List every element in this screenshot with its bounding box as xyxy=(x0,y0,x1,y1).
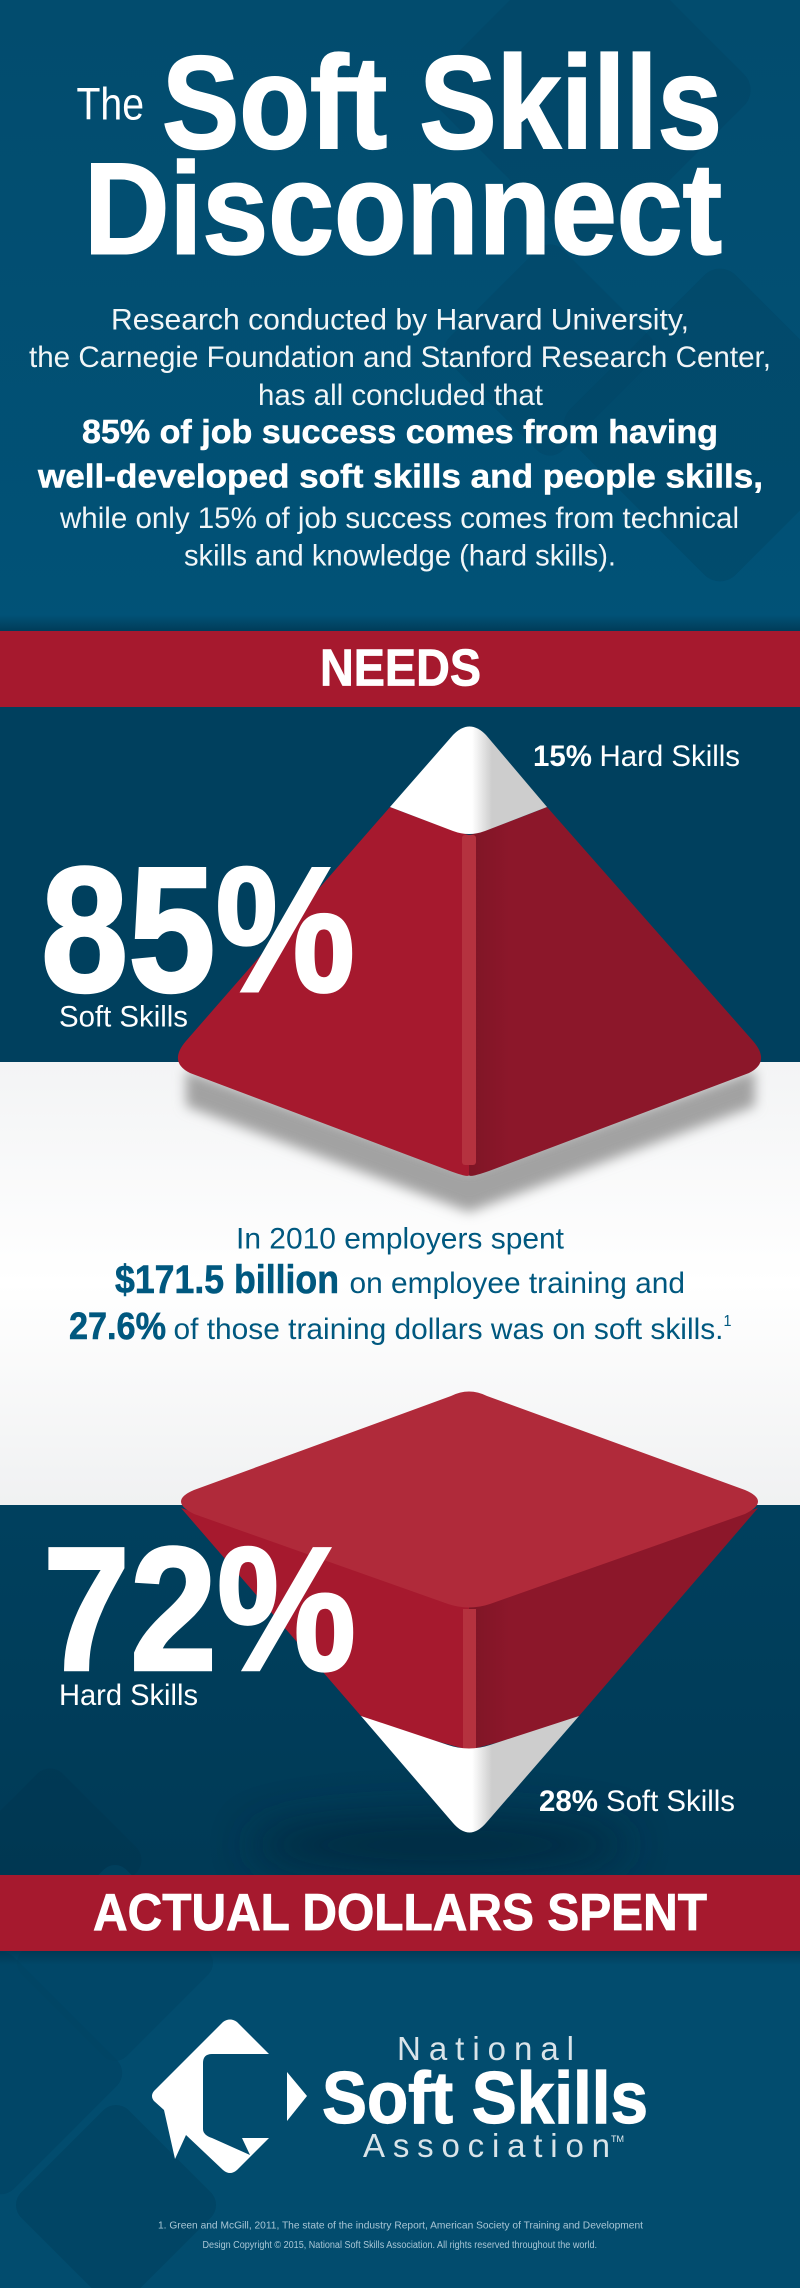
logo wordmark: TM xyxy=(611,2134,624,2144)
text block: training spend: on employee training and xyxy=(350,1267,685,1300)
logo wordmark xyxy=(322,2030,648,2164)
title xyxy=(76,29,722,282)
inverted pyramid right face xyxy=(469,1508,758,1750)
heading band: actual dollars spent: ACTUAL DOLLARS SPENT xyxy=(93,1884,707,1942)
logo: national soft skills association xyxy=(152,2020,648,2173)
text block: training spend: In 2010 employers spent xyxy=(236,1222,565,1256)
text block: training spend: $171.5 billion xyxy=(115,1258,339,1302)
intro paragraph: while only 15% of job success comes from technical xyxy=(59,502,739,535)
background: top header panel xyxy=(0,0,800,631)
footnotes: 1. Green and McGill, 2011, The state of the industry Report, American Society of Training and Development xyxy=(158,2220,643,2232)
stat: 15% hard skills xyxy=(533,740,740,773)
title: Soft Skills xyxy=(162,29,722,176)
inverted pyramid shadow xyxy=(250,1817,630,1873)
background: footer panel xyxy=(0,1858,800,2288)
intro paragraph: has all concluded that xyxy=(258,379,544,412)
text block: training spend: 27.6% xyxy=(69,1306,166,1348)
pyramid right face xyxy=(469,807,761,1176)
logo wordmark: National xyxy=(397,2030,574,2067)
background: white middle panel xyxy=(0,1062,800,1505)
stat: 28% soft skills: 28% xyxy=(539,1785,598,1818)
pyramid tip: hard skills xyxy=(390,726,547,834)
inverted pyramid top face xyxy=(181,1392,758,1608)
stat: 85% soft skills: Soft Skills xyxy=(59,1000,188,1034)
logo wordmark: Association xyxy=(363,2127,610,2164)
title: The xyxy=(76,78,144,130)
intro paragraph: the Carnegie Foundation and Stanford Research Center, xyxy=(29,341,771,374)
stat: 15% hard skills: Hard Skills xyxy=(600,740,740,773)
text block: training spend xyxy=(69,1222,732,1348)
text block: training spend: of those training dollars was on soft skills. xyxy=(174,1313,724,1346)
inverted pyramid left face: hard skills xyxy=(181,1508,469,1750)
inverted pyramid edge highlight xyxy=(463,1609,476,1750)
intro paragraph: Research conducted by Harvard University, xyxy=(111,304,689,337)
pyramid shadow xyxy=(186,1070,755,1212)
stat: 85% soft skills: 85% xyxy=(41,830,355,1029)
stat: 28% soft skills xyxy=(539,1785,735,1818)
chart: needs pyramid xyxy=(178,726,761,1212)
title: Disconnect xyxy=(84,136,722,282)
icon: logo mark xyxy=(152,2020,269,2173)
pyramid left face: soft skills xyxy=(178,807,469,1176)
footnotes: Design Copyright © 2015, National Soft Skills Association. All rights reserved throughout the world. xyxy=(202,2240,597,2251)
footnotes xyxy=(158,2220,643,2251)
heading band: needs xyxy=(0,631,800,707)
background: dark dollars panel xyxy=(0,1505,800,1959)
heading band: needs: NEEDS xyxy=(320,640,481,698)
intro paragraph: 85% of job success comes from having xyxy=(82,413,718,450)
background: dark needs panel xyxy=(0,707,800,1062)
chart: dollars pyramid xyxy=(181,1392,758,1873)
intro paragraph xyxy=(29,304,771,573)
stat: 15% hard skills: 15% xyxy=(533,740,592,773)
logo wordmark: Soft Skills xyxy=(322,2058,648,2139)
icon: logo arrow xyxy=(287,2072,307,2121)
stat: 72% hard skills: 72% xyxy=(43,1512,356,1708)
intro paragraph: skills and knowledge (hard skills). xyxy=(184,540,616,573)
stat: 72% hard skills: Hard Skills xyxy=(59,1679,198,1712)
inverted pyramid tip: soft skills xyxy=(361,1716,579,1832)
heading band: actual dollars spent xyxy=(0,1875,800,1951)
pyramid edge highlight xyxy=(462,835,476,1165)
stat: 28% soft skills: Soft Skills xyxy=(606,1785,735,1818)
text block: training spend: 1 xyxy=(724,1313,732,1330)
intro paragraph: well-developed soft skills and people skills, xyxy=(37,458,763,495)
